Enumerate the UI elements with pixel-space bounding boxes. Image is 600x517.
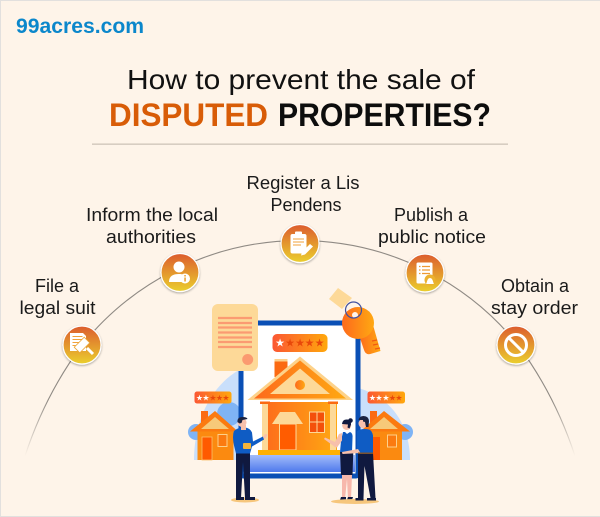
- logo: 99acres.com: 99acres.com: [16, 15, 144, 38]
- left rating badge: ★: [222, 394, 230, 402]
- illustration: property deal scene: [188, 288, 413, 504]
- right rating badge: ★: [375, 394, 383, 402]
- right house: [360, 411, 410, 460]
- main rating badge: ★: [315, 338, 325, 350]
- title: [109, 64, 491, 133]
- left rating badge: [194, 392, 232, 404]
- icon: clipboard with pencil: [290, 232, 313, 256]
- step: Obtain a stay order: Obtain a: [501, 276, 570, 296]
- document: [212, 304, 258, 371]
- step: Obtain a stay order: [491, 276, 578, 364]
- step: Register a Lis Pendens: Register a Lis: [246, 173, 360, 193]
- step: Inform the local authorities: [86, 205, 218, 292]
- person: man presenting: [231, 417, 268, 502]
- main rating badge: ★: [295, 338, 305, 350]
- left rating badge: ★: [209, 394, 217, 402]
- step: File a legal suit: File a: [35, 276, 80, 296]
- title: DISPUTED: [109, 97, 268, 133]
- right rating badge: [368, 392, 405, 404]
- main rating badge: ★: [275, 338, 285, 350]
- icon: document with gavel: [70, 333, 93, 354]
- person: man standing: [331, 416, 379, 504]
- step: Publish a public notice: Publish a: [394, 205, 469, 225]
- right rating badge: ★: [395, 394, 403, 402]
- main rating badge: [272, 334, 328, 352]
- step: File a legal suit: legal suit: [20, 298, 96, 318]
- left rating badge: ★: [196, 394, 203, 402]
- icon: prohibited sign: [506, 334, 526, 356]
- right rating badge: ★: [369, 394, 376, 402]
- step: Obtain a stay order: stay order: [491, 298, 578, 318]
- step: Register a Lis Pendens: Pendens: [270, 195, 342, 215]
- icon: notice with bell: [416, 262, 436, 286]
- right rating badge: ★: [382, 394, 390, 402]
- icon: person with info badge: [169, 262, 190, 284]
- left house: [190, 411, 238, 460]
- background blue blobs: [188, 370, 413, 460]
- main rating badge: ★: [305, 338, 315, 350]
- title: PROPERTIES?: [278, 97, 491, 133]
- step: File a legal suit: [20, 276, 101, 364]
- key with tag: [329, 288, 380, 354]
- main rating badge: ★: [285, 338, 295, 350]
- step: Inform the local authorities: Inform the local: [86, 205, 218, 225]
- step: Inform the local authorities: authorities: [106, 227, 196, 247]
- person: woman: [324, 418, 353, 500]
- left rating badge: ★: [216, 394, 223, 402]
- tablet frame: [241, 323, 358, 476]
- arc connecting the steps: [25, 241, 575, 456]
- step: Publish a public notice: [378, 205, 486, 292]
- step: Publish a public notice: public notice: [378, 227, 486, 247]
- main house: [248, 356, 353, 455]
- right rating badge: ★: [389, 394, 396, 402]
- title: How to prevent the sale of: [127, 64, 475, 95]
- left rating badge: ★: [202, 394, 210, 402]
- step: Register a Lis Pendens: [246, 173, 360, 262]
